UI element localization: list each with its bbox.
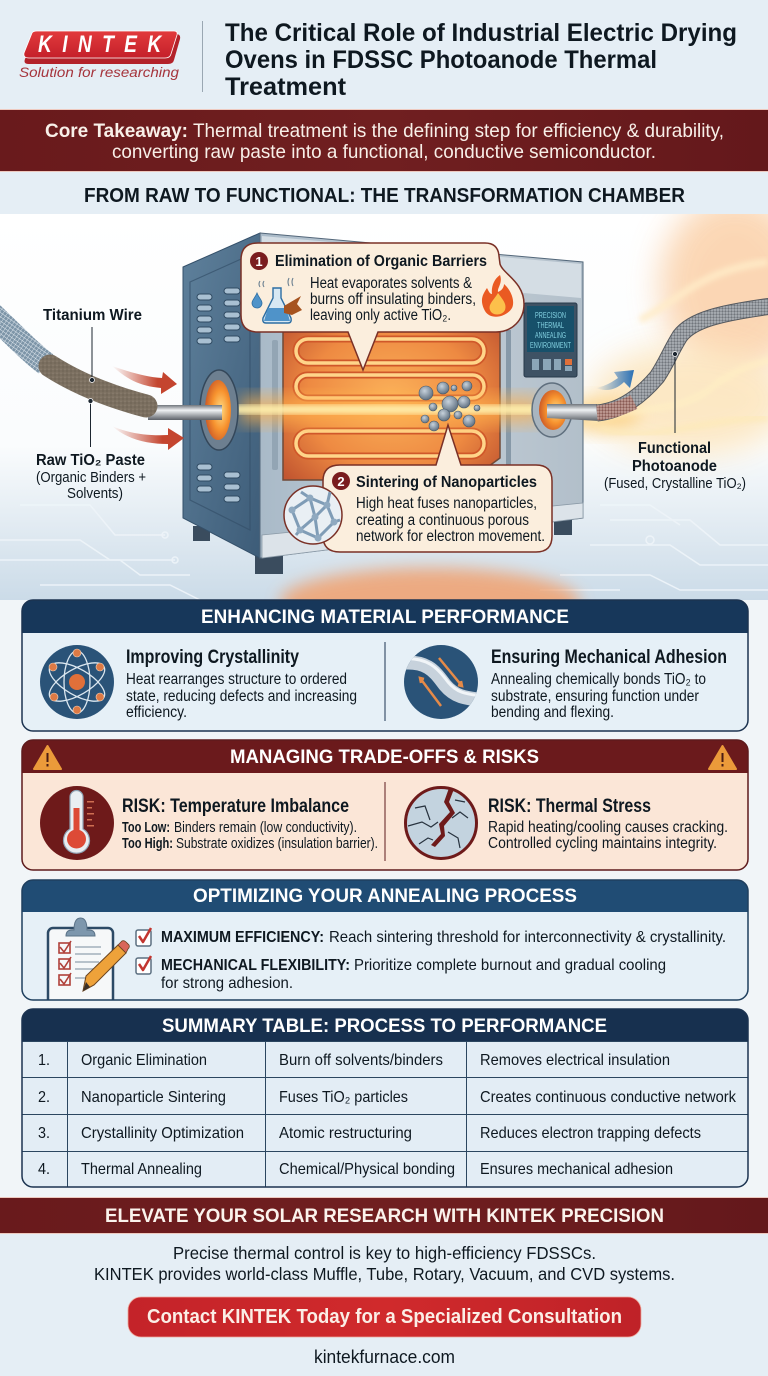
text: improving crystallinity: efficiency. — [126, 704, 187, 721]
oven feet — [193, 518, 572, 574]
icon: clipboard with pencil — [48, 918, 129, 1008]
red arrow: upper — [112, 366, 177, 394]
table grid lines — [22, 1041, 748, 1187]
text: thermal stress: Rapid heating/cooling causes cracking. — [488, 819, 728, 836]
icon: flask with droplet and burning binder — [252, 278, 302, 323]
panel: managing trade-offs and risks — [22, 740, 748, 870]
control panel: ENVIRONMENT — [530, 341, 571, 350]
hero illustration: transformation chamber — [0, 214, 768, 600]
wire: titanium mesh — [0, 314, 46, 364]
panel: summary table — [22, 1009, 748, 1187]
callout 2: Sintering of Nanoparticles: creating a continuous porous — [356, 512, 529, 529]
label: Raw TiO2 Paste: Raw TiO₂ Paste — [36, 452, 145, 469]
table row 3: 3. — [38, 1125, 50, 1142]
oven front face — [260, 233, 583, 558]
wire: raw TiO2 paste coating — [50, 366, 146, 406]
table row 3: Reduces electron trapping defects — [480, 1125, 701, 1142]
control panel: THERMAL — [537, 321, 564, 330]
title: Ovens in FDSSC Photoanode Thermal — [225, 46, 657, 74]
metal tube exiting oven — [547, 404, 599, 421]
logo: KINTEK — [19, 30, 180, 80]
text: improving crystallinity: Improving Crystallinity — [126, 647, 299, 668]
title: The Critical Role of Industrial Electric Drying — [225, 19, 737, 47]
label: Titanium Wire: Titanium Wire — [43, 307, 142, 324]
wire: metal tube entering oven — [148, 405, 222, 420]
icon: atom — [40, 645, 114, 719]
callout 2: Sintering of Nanoparticles: network for electron movement. — [356, 528, 545, 545]
heating chamber — [282, 332, 501, 481]
label: Functional Photoanode: (Fused, Crystalline TiO₂) — [604, 476, 746, 492]
core takeaway banner: Thermal treatment is the defining step for efficiency & durability, — [193, 120, 724, 142]
label: Raw TiO2 Paste: (Organic Binders + — [36, 470, 146, 486]
item: mechanical flexibility: Prioritize complete burnout and gradual cooling — [354, 957, 666, 974]
item: maximum efficiency — [136, 928, 726, 946]
text: thermal stress: RISK: Thermal Stress — [488, 796, 651, 817]
text: temperature imbalance: Too High: — [122, 835, 173, 852]
contact button: Contact KINTEK Today for a Specialized Consultation — [147, 1305, 622, 1328]
core takeaway banner — [0, 109, 768, 172]
oven side face — [183, 233, 260, 558]
text: ensuring mechanical adhesion: bending and flexing. — [491, 704, 614, 721]
table row 3 — [38, 1125, 701, 1142]
core takeaway banner: converting raw paste into a functional, conductive semiconductor. — [112, 141, 656, 163]
text: thermal stress: Controlled cycling maintains integrity. — [488, 835, 717, 852]
text: ensuring mechanical adhesion: Ensuring Mechanical Adhesion — [491, 647, 727, 668]
table row 3: Crystallinity Optimization — [81, 1125, 244, 1142]
body text: Precise thermal control is key to high-efficiency FDSSCs. — [173, 1243, 596, 1263]
callout 1: Elimination of Organic Barriers: burns off insulating binders, — [310, 291, 476, 308]
icon: fused particle network — [284, 486, 342, 544]
heading: SUMMARY TABLE: PROCESS TO PERFORMANCE — [162, 1015, 607, 1037]
banner: ELEVATE YOUR SOLAR RESEARCH WITH KINTEK PRECISION — [105, 1205, 664, 1227]
heat swirls — [584, 214, 768, 470]
body text — [94, 1243, 675, 1284]
table row 1: 1. — [38, 1052, 50, 1069]
heading: OPTIMIZING YOUR ANNEALING PROCESS — [193, 885, 577, 907]
electric oven — [183, 233, 583, 574]
table row 2: 2. — [38, 1089, 50, 1106]
table row 2: Creates continuous conductive network — [480, 1089, 737, 1106]
table row 1: Organic Elimination — [81, 1052, 207, 1069]
panel: enhancing material performance — [22, 600, 748, 731]
contact button — [128, 1297, 641, 1337]
label: Titanium Wire — [43, 307, 142, 382]
label: Raw TiO2 Paste — [36, 398, 146, 502]
table row 2: Nanoparticle Sintering — [81, 1089, 226, 1106]
table row 2: Fuses TiO₂ particles — [279, 1089, 408, 1106]
section heading: transformation chamber: FROM RAW TO FUNCTIONAL: THE TRANSFORMATION CHAMBER — [84, 185, 686, 207]
nanoparticles — [419, 381, 480, 431]
text: temperature imbalance: Binders remain (low conductivity). — [174, 819, 357, 836]
website: kintekfurnace.com — [314, 1346, 455, 1367]
control panel — [524, 303, 577, 377]
item: maximum efficiency: MAXIMUM EFFICIENCY: — [161, 929, 324, 946]
step badge 1 — [250, 252, 268, 270]
text: improving crystallinity: state, reducing defects and increasing — [126, 688, 357, 705]
icon: warning left — [34, 746, 61, 769]
item: mechanical flexibility: MECHANICAL FLEXIBILITY: — [161, 957, 350, 974]
right port — [532, 383, 572, 437]
heating coils — [296, 339, 484, 456]
left port — [200, 370, 238, 450]
callout 2: Sintering of Nanoparticles: High heat fuses nanoparticles, — [356, 495, 537, 512]
label: Raw TiO2 Paste: Solvents) — [67, 486, 123, 502]
table row 1: Burn off solvents/binders — [279, 1052, 443, 1069]
item: mechanical flexibility — [136, 956, 666, 992]
logo: KINTEK: Solution for researching — [19, 65, 180, 80]
callout 2: Sintering of Nanoparticles — [284, 425, 552, 552]
callout 1: Elimination of Organic Barriers: Heat evaporates solvents & — [310, 275, 473, 292]
text: temperature imbalance: Substrate oxidizes (insulation barrier). — [176, 835, 378, 852]
banner — [0, 1197, 768, 1234]
label: Functional Photoanode: Functional — [638, 440, 711, 457]
wire: functional photoanode — [597, 306, 768, 413]
text: improving crystallinity — [126, 647, 357, 721]
footer call to action — [0, 1197, 768, 1376]
step badge 1: 1 — [255, 254, 263, 269]
item: maximum efficiency: Reach sintering threshold for interconnectivity & crystallinity. — [329, 929, 726, 946]
heading: MANAGING TRADE-OFFS & RISKS — [230, 746, 539, 768]
table row 4: Thermal Annealing — [81, 1161, 202, 1178]
table row 1 — [38, 1052, 670, 1069]
hot beam — [232, 396, 544, 424]
callout 2: Sintering of Nanoparticles: Sintering of Nanoparticles — [356, 474, 537, 491]
text: temperature imbalance — [122, 796, 378, 852]
table row 4: Ensures mechanical adhesion — [480, 1161, 673, 1178]
header — [0, 0, 768, 214]
callout 1: Elimination of Organic Barriers — [241, 243, 524, 370]
icon: flame — [482, 275, 513, 317]
label: Functional Photoanode — [604, 352, 746, 492]
icon: thermometer — [40, 786, 114, 860]
table row 4 — [38, 1161, 673, 1178]
item: mechanical flexibility: for strong adhesion. — [161, 975, 293, 992]
callout 1: Elimination of Organic Barriers: leaving only active TiO₂. — [310, 307, 451, 324]
text: improving crystallinity: Heat rearranges structure to ordered — [126, 671, 347, 688]
table row 3: Atomic restructuring — [279, 1125, 412, 1142]
heading: ENHANCING MATERIAL PERFORMANCE — [201, 606, 569, 628]
title: Treatment — [225, 73, 347, 101]
control panel: ANNEALING — [535, 331, 566, 340]
text: ensuring mechanical adhesion: substrate, ensuring function under — [491, 688, 699, 705]
step badge 2: 2 — [337, 474, 345, 489]
callout 1: Elimination of Organic Barriers: Elimination of Organic Barriers — [275, 253, 487, 270]
icon: warning right — [709, 746, 736, 769]
label: Functional Photoanode: Photoanode — [632, 458, 717, 475]
blue arrow — [596, 370, 634, 390]
logo: KINTEK: KINTEK — [38, 30, 162, 58]
table row 2 — [38, 1089, 737, 1106]
step badge 2 — [332, 472, 350, 490]
table row 4: Chemical/Physical bonding — [279, 1161, 455, 1178]
text: ensuring mechanical adhesion: Annealing chemically bonds TiO₂ to — [491, 671, 706, 688]
text: temperature imbalance: Too Low: — [122, 819, 170, 836]
panel: optimizing your annealing process — [22, 880, 748, 1008]
circuit traces — [0, 515, 768, 600]
core takeaway banner: Core Takeaway: — [45, 120, 188, 142]
control panel: PRECISION — [535, 311, 566, 320]
text: ensuring mechanical adhesion — [491, 647, 727, 721]
table row 1: Removes electrical insulation — [480, 1052, 670, 1069]
red arrow: lower — [112, 426, 184, 450]
icon: bending substrate — [400, 645, 482, 719]
text: temperature imbalance: RISK: Temperature Imbalance — [122, 796, 349, 817]
title — [225, 19, 737, 101]
icon: cracked surface — [406, 788, 476, 858]
table row 4: 4. — [38, 1161, 50, 1178]
body text: KINTEK provides world-class Muffle, Tube, Rotary, Vacuum, and CVD systems. — [94, 1264, 675, 1284]
text: thermal stress — [488, 796, 728, 852]
